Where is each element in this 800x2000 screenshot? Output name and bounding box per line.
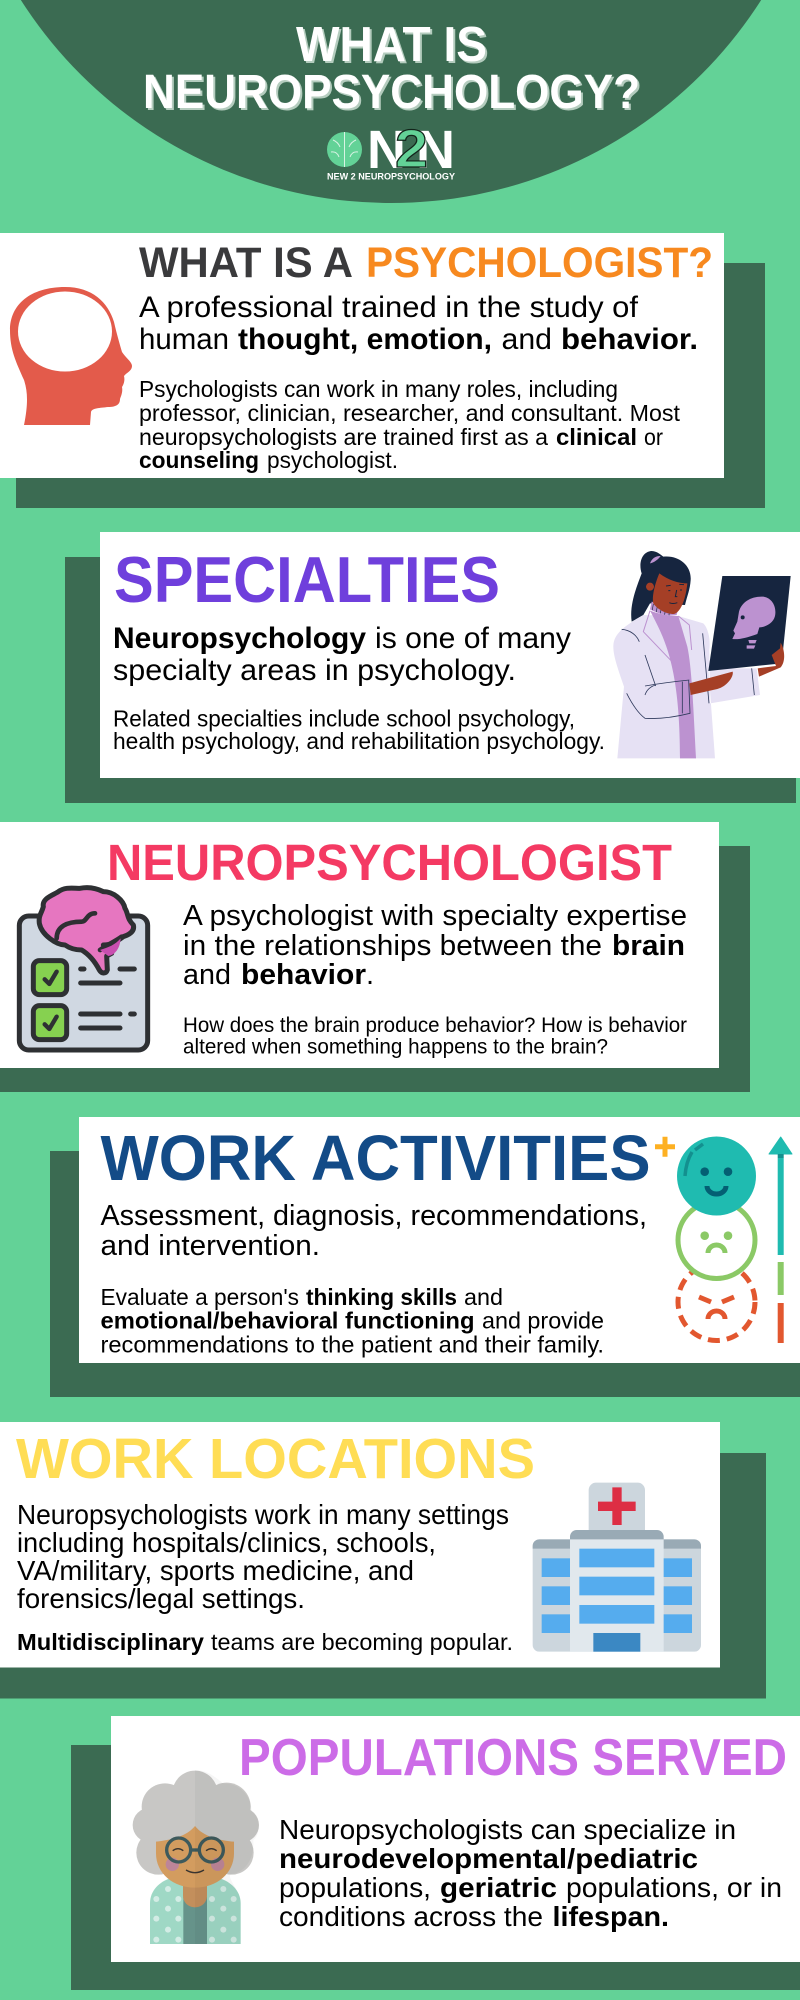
header: title and logo on dark semicircle <box>0 0 800 203</box>
title: WHAT IS <box>296 18 487 72</box>
detail text: teams are becoming popular. <box>211 1629 513 1655</box>
definition text: populations, or in <box>566 1872 782 1903</box>
checkbox 2 <box>33 1006 67 1040</box>
definition text: A psychologist with specialty expertise <box>183 900 687 932</box>
panel: work locations <box>0 1422 766 1698</box>
definition text: and <box>183 959 231 991</box>
logo: N2N brain: NEW 2 NEUROPSYCHOLOGY <box>327 172 456 182</box>
turtleneck <box>650 602 678 615</box>
heading: WORK LOCATIONS <box>16 1427 535 1491</box>
definition text: behavior. <box>561 323 698 356</box>
panel shadow <box>0 846 750 1092</box>
wing roof <box>533 1539 701 1549</box>
ear <box>646 583 654 591</box>
clipboard <box>19 916 148 1050</box>
title <box>143 18 640 119</box>
detail text: health psychology, and rehabilitation psychology. <box>113 728 605 754</box>
definition text: geriatric <box>440 1872 557 1903</box>
definition text: Assessment, diagnosis, recommendations, <box>100 1200 647 1232</box>
panel card <box>111 1716 800 1962</box>
green outline face <box>678 1202 755 1278</box>
definition text: brain <box>612 930 685 962</box>
heading: SPECIALTIES <box>114 543 500 616</box>
main block <box>570 1538 664 1652</box>
detail text <box>100 1284 604 1358</box>
detail text: clinical <box>556 424 637 450</box>
hair tie <box>650 556 661 563</box>
heading <box>139 239 713 287</box>
icon: head silhouette <box>10 287 132 425</box>
detail text: thinking skills <box>306 1284 457 1310</box>
panel card <box>79 1117 800 1363</box>
collar purple lines <box>643 611 692 669</box>
panel: neuropsychologist <box>0 822 750 1092</box>
icon: plus sign <box>655 1137 675 1157</box>
roof sign <box>589 1483 645 1533</box>
definition text: neurodevelopmental/pediatric <box>279 1843 698 1874</box>
brain folds <box>57 913 122 950</box>
definition text: human <box>139 323 229 356</box>
detail text: recommendations to the patient and their family. <box>100 1332 604 1358</box>
definition text <box>279 1814 782 1932</box>
definition text: behavior <box>241 959 366 991</box>
definition text: conditions across the <box>279 1901 543 1932</box>
arrow: mood scale <box>769 1137 792 1343</box>
near hand <box>689 672 733 695</box>
panel shadow <box>0 1453 766 1698</box>
far hand <box>758 643 784 677</box>
panel: populations served <box>71 1716 800 1990</box>
checklist lines <box>81 969 134 1028</box>
panel: what is a psychologist <box>0 233 765 508</box>
panel shadow <box>50 1151 800 1397</box>
detail text <box>139 376 681 473</box>
heading: WHAT IS A <box>139 239 353 287</box>
main roof <box>570 1530 664 1539</box>
turtleneck ribs <box>652 604 669 615</box>
teal smiling face <box>677 1136 756 1216</box>
definition text: A professional trained in the study of <box>139 291 639 324</box>
red cross <box>598 1487 636 1525</box>
windows <box>542 1549 692 1633</box>
shirt <box>650 611 696 758</box>
inner shirt <box>183 1897 207 1944</box>
definition text: Neuropsychologists work in many settings <box>17 1499 509 1530</box>
logo: N2N brain <box>327 119 456 182</box>
icon: logo brain <box>327 132 362 167</box>
detail text <box>113 706 605 754</box>
checkbox 1 <box>33 961 67 995</box>
hair <box>133 1771 259 1875</box>
door <box>593 1633 640 1652</box>
icon: mood faces <box>677 1136 756 1340</box>
panel card <box>0 1422 720 1668</box>
definition text: lifespan. <box>552 1901 669 1932</box>
icon: hospital <box>533 1483 701 1652</box>
neck <box>183 1883 207 1907</box>
check mark 1 <box>45 972 57 984</box>
logo: N2N brain: N <box>416 120 455 180</box>
detail text: professor, clinician, researcher, and consultant. Most <box>139 400 681 426</box>
heading: WORK ACTIVITIES <box>100 1122 650 1194</box>
panel shadow <box>65 557 796 803</box>
detail text <box>183 1014 687 1058</box>
panel card <box>0 233 724 478</box>
definition text: Neuropsychologists can specialize in <box>279 1814 736 1845</box>
logo: N2N brain: N <box>367 120 406 180</box>
panel shadow <box>16 263 765 508</box>
cardigan <box>150 1878 241 1944</box>
definition text: is one of many <box>375 622 571 655</box>
cheeks <box>166 1858 179 1871</box>
definition text <box>139 291 698 356</box>
illustration: doctor reading skull x-ray <box>613 551 791 758</box>
detail text: Multidisciplinary <box>17 1629 204 1655</box>
definition text: and <box>502 323 552 356</box>
definition text: and intervention. <box>100 1230 320 1262</box>
face <box>653 573 687 614</box>
detail text: or <box>644 424 663 450</box>
eyes and smile <box>173 1849 217 1873</box>
face <box>156 1826 234 1888</box>
title: NEUROPSYCHOLOGY? <box>143 66 640 119</box>
detail text: altered when something happens to the brain? <box>183 1036 608 1058</box>
panel: specialties <box>65 532 800 803</box>
illustration: grandmother <box>133 1770 259 1944</box>
definition text: specialty areas in psychology. <box>113 654 516 687</box>
heading: PSYCHOLOGIST? <box>366 239 713 287</box>
detail text: emotional/behavioral functioning <box>100 1308 474 1334</box>
detail text: and <box>464 1284 503 1310</box>
x-ray sheet <box>708 576 791 671</box>
definition text: populations, <box>279 1872 431 1903</box>
definition text: forensics/legal settings. <box>17 1583 305 1614</box>
facial features <box>666 584 684 603</box>
detail text: neuropsychologists are trained first as a <box>139 424 548 450</box>
skull eye <box>741 615 745 619</box>
detail text: Evaluate a person's <box>100 1284 299 1310</box>
hair <box>631 551 691 622</box>
panel: work activities <box>50 1117 800 1397</box>
detail text: Psychologists can work in many roles, including <box>139 376 618 402</box>
red dashed face <box>678 1264 755 1340</box>
definition text <box>100 1200 647 1262</box>
icon: head inner circle <box>18 292 112 372</box>
detail text: psychologist. <box>267 447 398 473</box>
definition text: in the relationships between the <box>183 930 602 962</box>
definition text <box>17 1499 509 1614</box>
header semicircle <box>0 0 800 203</box>
definition text <box>183 900 687 991</box>
definition text: VA/military, sports medicine, and <box>17 1555 414 1586</box>
lab coat <box>613 615 760 758</box>
detail text <box>17 1629 513 1655</box>
panel shadow <box>71 1745 800 1990</box>
brain stem shade <box>100 938 121 956</box>
definition text: including hospitals/clinics, schools, <box>17 1527 436 1558</box>
detail text: How does the brain produce behavior? How is behavior <box>183 1014 687 1037</box>
heading: NEUROPSYCHOLOGIST <box>107 834 672 891</box>
definition text: thought, emotion, <box>238 323 492 356</box>
cardigan dots <box>153 1886 237 1943</box>
detail text: counseling <box>139 447 259 473</box>
detail text: Related specialties include school psychology, <box>113 706 575 732</box>
definition text: Neuropsychology <box>113 622 366 655</box>
panel card <box>0 822 719 1068</box>
icon: brain on checklist <box>19 888 148 1050</box>
right half shading <box>195 1770 259 1944</box>
detail text: and provide <box>482 1308 604 1334</box>
side wings <box>533 1539 701 1652</box>
skull <box>732 597 775 649</box>
coat seams <box>622 629 754 719</box>
panel card <box>100 532 800 778</box>
definition text: . <box>366 959 374 991</box>
definition text <box>113 622 571 687</box>
brain <box>39 888 134 973</box>
logo: N2N brain: 2 <box>395 119 428 179</box>
check mark 2 <box>45 1017 57 1029</box>
glasses <box>167 1838 223 1862</box>
